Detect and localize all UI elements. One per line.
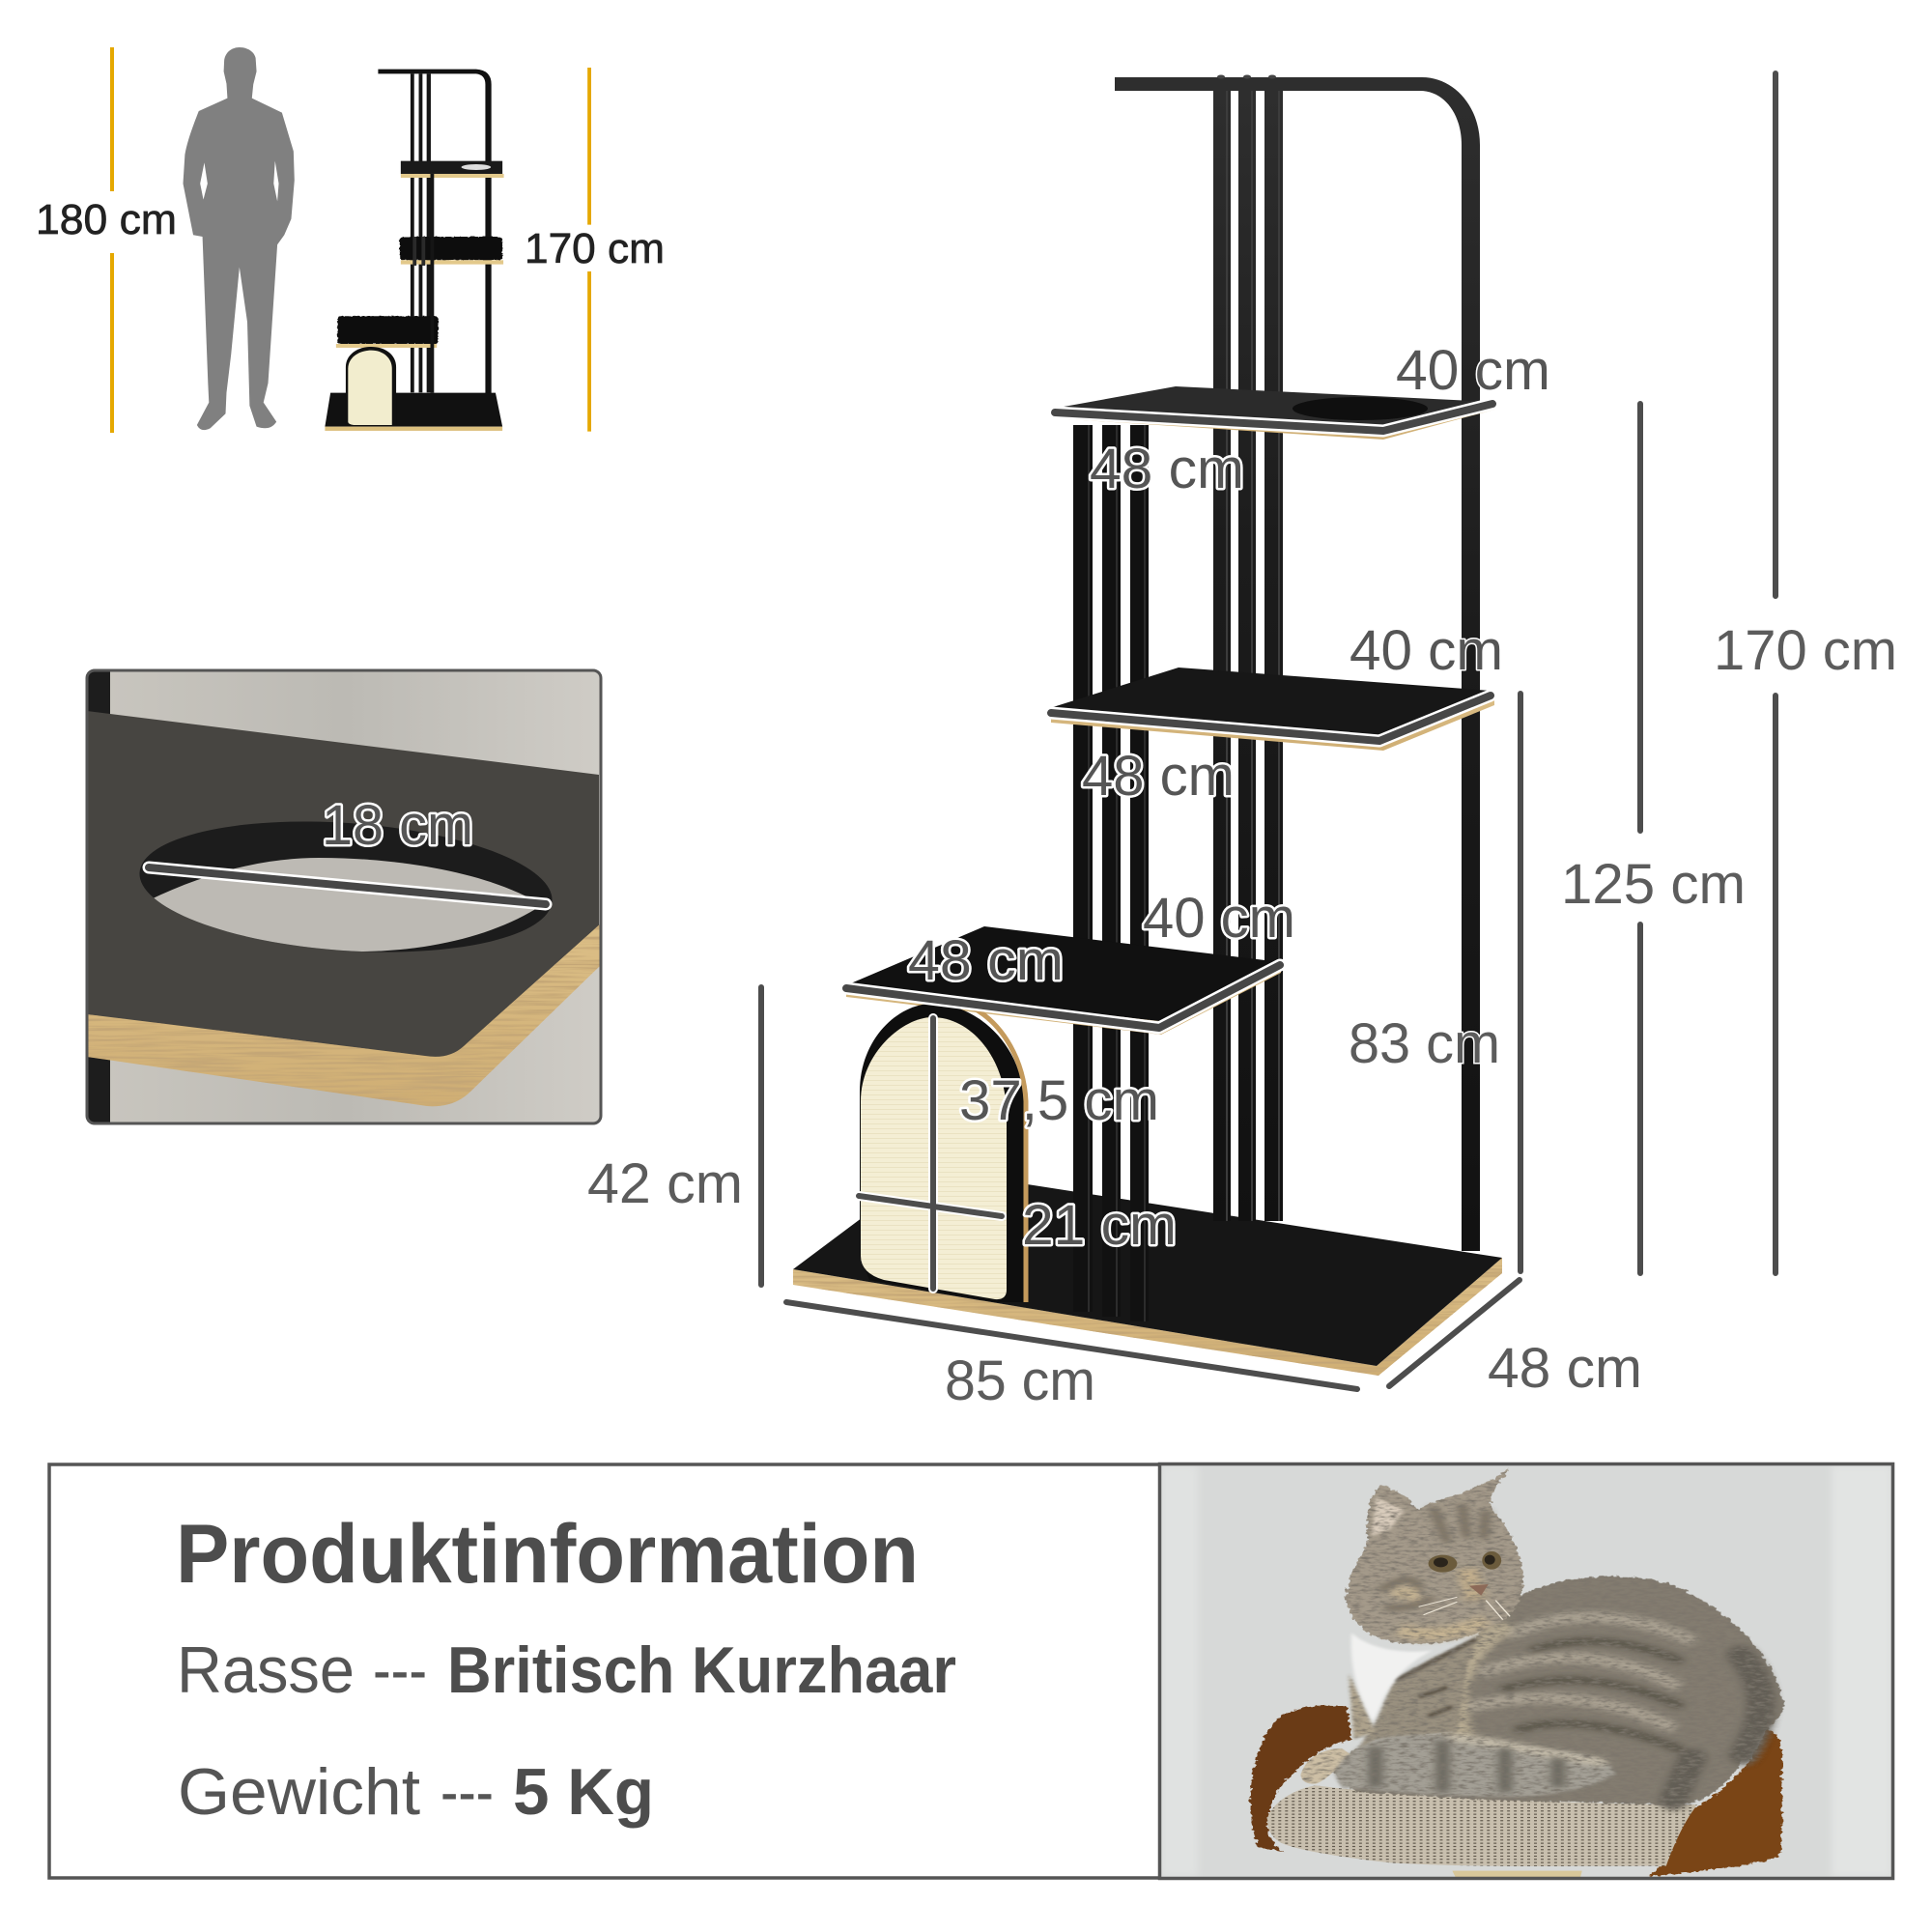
cat <box>1301 1468 1784 1804</box>
nose <box>1469 1584 1489 1596</box>
dimension labels <box>587 339 1897 1412</box>
shelf 1 with bowl hole <box>1053 386 1494 440</box>
front poles <box>1073 425 1149 1321</box>
83 cm height line <box>1518 694 1523 1271</box>
base width line <box>786 1302 1357 1389</box>
label: 18 cm: 18 cm <box>322 794 473 857</box>
label: base width: 85 cm <box>945 1350 1095 1412</box>
body <box>1332 1577 1784 1804</box>
cushion <box>1267 1785 1697 1866</box>
label: 180 cm: 180 cm <box>36 196 177 243</box>
post <box>1453 1870 1582 1877</box>
white chest <box>1351 1633 1434 1722</box>
top rail and right post <box>1115 75 1480 1251</box>
label: shelf 3 depth: 40 cm <box>1143 887 1295 950</box>
dimension lines: scratching board <box>859 1018 1002 1289</box>
overall height line <box>1773 73 1778 1273</box>
label: 125 cm: 125 cm <box>1561 853 1746 916</box>
label: 170 cm: 170 cm <box>1714 619 1897 682</box>
tree height line <box>585 68 593 432</box>
bed wings <box>1250 1705 1782 1877</box>
text: weight: 5 Kg <box>513 1755 654 1829</box>
label: base depth: 48 cm <box>1488 1337 1642 1400</box>
panel: product information <box>49 1463 1893 1881</box>
ear inner <box>1372 1497 1405 1536</box>
label: shelf 1 depth: 40 cm <box>1396 339 1550 402</box>
dimension line: hole diameter <box>149 867 546 904</box>
head <box>1346 1468 1523 1644</box>
label: board width: 21 cm <box>1022 1194 1177 1257</box>
shoulder left edge <box>1349 1674 1376 1739</box>
icon: person silhouette <box>183 47 295 430</box>
label: 42 cm: 42 cm <box>587 1152 743 1215</box>
label: 83 cm: 83 cm <box>1349 1012 1500 1075</box>
text: breed: --- <box>373 1634 427 1707</box>
eyes <box>1429 1555 1457 1573</box>
person height line <box>110 47 114 433</box>
shelf width and depth lines <box>846 404 1492 1028</box>
text: weight: --- <box>440 1755 494 1829</box>
shelf 2 <box>1051 668 1494 751</box>
scratching board <box>859 1004 1026 1302</box>
label: board height: 37,5 cm <box>959 1069 1159 1132</box>
neck and shoulder <box>1356 1643 1475 1748</box>
miniature cat tree <box>325 70 504 431</box>
base depth line <box>1389 1280 1520 1386</box>
dimension lines <box>761 73 1776 1389</box>
tail <box>1301 1735 1616 1797</box>
text: breed: Rasse <box>177 1634 355 1707</box>
text: breed <box>177 1634 956 1707</box>
text: weight: Gewicht <box>178 1755 420 1829</box>
label: shelf 3 width: 48 cm <box>908 929 1064 992</box>
text: weight <box>178 1755 654 1829</box>
text: breed: Britisch Kurzhaar <box>447 1634 956 1707</box>
main cat tree <box>793 75 1502 1376</box>
shelf 3 <box>846 926 1281 1035</box>
label: shelf 2 width: 48 cm <box>1082 745 1235 808</box>
fur shading <box>1457 1617 1761 1800</box>
125 cm height line <box>1637 404 1643 1273</box>
face shading <box>1380 1504 1486 1634</box>
rear poles <box>1213 91 1283 1221</box>
whiskers <box>1419 1597 1510 1620</box>
detail panel: bowl hole in shelf <box>86 669 602 1124</box>
heading: Produktinformation <box>176 1508 919 1601</box>
label: 170 cm: 170 cm <box>525 225 665 272</box>
size comparison: person and tree <box>36 47 665 433</box>
base board <box>793 1169 1502 1376</box>
42 cm height line <box>758 987 764 1285</box>
label: shelf 1 width: 48 cm <box>1090 438 1244 500</box>
label: shelf 2 depth: 40 cm <box>1350 619 1503 682</box>
photo: cat on perch <box>1159 1463 1893 1881</box>
